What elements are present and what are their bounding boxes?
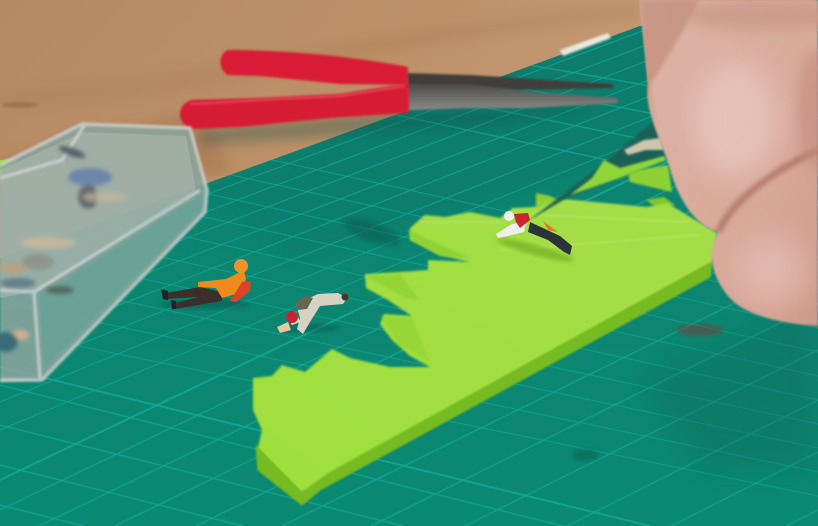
upper knuckle	[680, 0, 818, 31]
reflected figure	[624, 138, 664, 155]
lime 3D printed mountain	[253, 165, 717, 505]
box body	[0, 124, 207, 382]
white pen on mat	[560, 33, 611, 56]
mountain side wall	[256, 235, 716, 505]
hand base	[640, 0, 818, 326]
finger crease	[718, 150, 818, 232]
box lid face	[0, 132, 196, 298]
back tab behind the main ridge	[628, 165, 672, 192]
plier upper jaw	[406, 73, 614, 90]
plier shadow	[200, 108, 610, 145]
figure: orange climber on mat	[161, 259, 251, 309]
hand shading	[640, 0, 818, 306]
hand	[640, 0, 818, 326]
plier lower jaw	[408, 84, 618, 110]
plastic box of figures	[0, 124, 207, 382]
figures inside box	[0, 143, 127, 352]
mountain top surface	[253, 199, 717, 493]
lime sliver at left edge	[0, 158, 20, 176]
mountain ridge highlights	[420, 215, 700, 250]
wooden table	[0, 0, 818, 270]
upper red handle	[220, 50, 408, 85]
figure: climber hanging from tweezers	[495, 211, 575, 265]
finger highlights	[690, 60, 780, 180]
box edges	[0, 124, 207, 380]
top finger shadow	[640, 0, 699, 112]
reflected green ridge	[570, 156, 666, 195]
box side face	[40, 196, 202, 368]
pliers	[180, 50, 618, 145]
mountain shaded edge	[256, 262, 712, 505]
figure: red helmet climber on mat	[277, 293, 348, 334]
tweezers holding reflection	[528, 118, 668, 221]
lower red handle	[180, 83, 409, 129]
right edge shade	[797, 50, 818, 170]
